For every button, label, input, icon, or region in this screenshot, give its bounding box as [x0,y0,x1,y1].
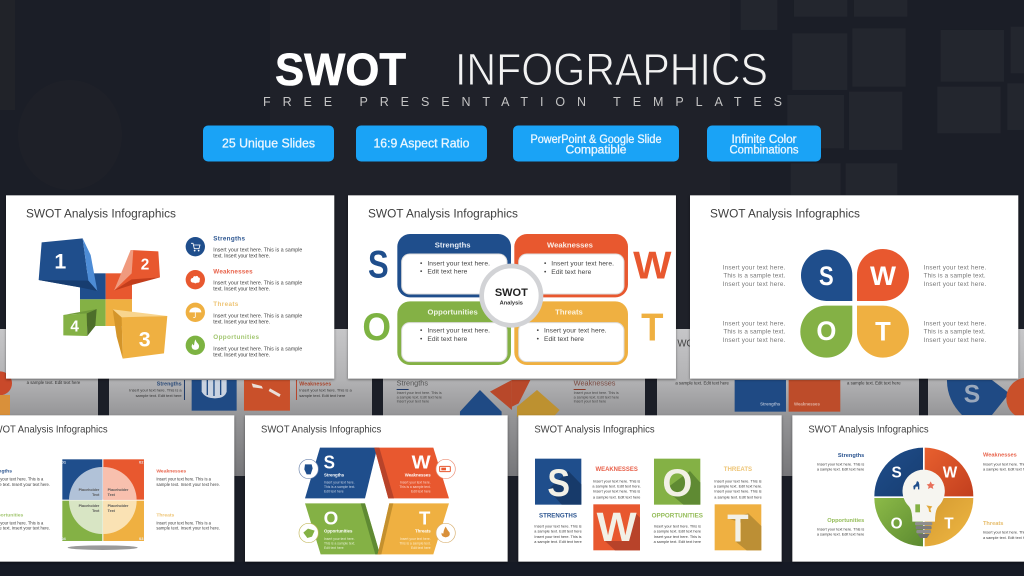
legend: weaknesses: Insert your text here. This is a sample [213,280,302,286]
3D blocks chart: 4 [70,319,79,336]
3D blocks chart [39,238,167,359]
block: weaknesses [374,448,449,498]
block: strengths: S [324,451,335,472]
background slide fragments: left half: Insert your text here. This is a [299,388,352,393]
legend: strengths: Strengths [213,235,245,242]
button: 25 unique slides: 25 Unique Slides [222,136,315,150]
square quadrant chart: 01 [62,459,67,464]
box: weaknesses [514,234,628,297]
text block: upper left [723,264,786,288]
block: opportunities: O [324,507,338,528]
panel: slide 7 light bulb pie: SWOT Analysis Infographics [808,425,929,436]
text: strengths [0,469,50,487]
background slide fragments: left half: Strengths [157,381,182,387]
text: opportunities [0,512,50,531]
text: opportunities: Opportunities [827,518,864,524]
text block: upper right: Insert your text here. [924,264,987,271]
tile: W: W [597,504,637,550]
legend: opportunities: text. Insert your text here. [213,353,270,359]
text: weaknesses [592,467,641,499]
big letters: T [641,307,664,350]
text: strengths: Insert your text here. This is [534,535,582,539]
petal: S [801,250,852,301]
background slide fragments: right half: a sample text. Edit text here [675,381,730,386]
text block: upper right: Insert your text here. [924,281,987,288]
text: opportunities: Insert your text here. This is [654,525,701,529]
background slide fragments: right half: Insert your text here. This is [574,391,619,395]
text block: upper left: Insert your text here. [723,264,786,271]
box: strengths: Strengths [435,240,471,249]
panel: slide 4 placeholder square [0,415,234,562]
box: opportunities: Opportunities [428,308,478,317]
text: opportunities [817,518,864,537]
block: weaknesses: Weaknesses [405,473,431,478]
block: threats: T [419,507,430,528]
text: threats: Insert your text here. This is [714,490,762,494]
text: strengths: a sample text. Edit text here [534,540,582,544]
box: threats: Edit text here [544,336,584,343]
icon: umbrella [186,303,205,322]
square quadrant chart: Text [108,509,116,513]
legend: threats: Threats [213,301,239,308]
3D blocks chart: 1 [54,249,66,273]
square quadrant chart: Placeholder [108,488,129,492]
box: threats: • [537,328,540,335]
block: threats [378,503,449,554]
background slide fragments: right half: a sample text. Edit text here [574,395,619,399]
box: opportunities: • [420,336,423,343]
box: threats [514,301,628,365]
panel: slide 2 four boxes with center circle: SWOT Analysis Infographics [368,206,518,220]
text: strengths: Strengths [838,453,864,459]
title: INFOGRAPHICS [455,44,768,95]
box: strengths: • [420,269,423,276]
square quadrant chart: 02 [139,459,144,464]
title: SWOT [275,44,406,95]
big letters: O [362,306,391,349]
big letters: W [633,244,672,287]
petal: W: W [870,261,897,291]
tile: T: T [727,508,749,551]
legend: threats: Insert your text here. This is a sample [213,313,302,319]
box: weaknesses: • [544,261,547,268]
box: threats: Insert your text here. [544,328,607,335]
text: strengths: a sample text. Edit text here [534,530,582,534]
square quadrant chart: Text [92,509,100,513]
tile: T [715,504,761,551]
text: threats: Threats [983,521,1003,527]
text: strengths [534,513,582,544]
legend: weaknesses: text. Insert your text here. [213,287,270,293]
background slide fragments: left half: Weaknesses [299,381,331,387]
text: opportunities: a sample text. Edit text here [654,540,701,544]
tile: S: S [547,461,570,505]
petal: W [857,249,909,301]
block: strengths: This is a sample text. [324,485,355,489]
block: opportunities [305,503,380,554]
text block: upper left: This is a sample text. [723,273,786,280]
box: weaknesses: Insert your text here. [551,261,614,268]
icon: battery [436,459,455,479]
text: weaknesses: a sample text. Edit text here. [592,485,641,489]
block: threats: Insert your text here. [400,537,431,541]
text block: lower left: This is a sample text. [723,329,786,336]
square quadrant chart: Placeholder [108,504,129,508]
button: infinite color [707,126,821,162]
pie with bulb: S [892,465,902,482]
text: opportunities: a sample text. Edit text here [654,530,701,534]
tile: S [535,459,581,505]
legend: opportunities [213,334,302,359]
text: weaknesses: Insert your text here. This is [593,480,640,484]
text: threats: Insert your text here. This is a [156,520,212,525]
text: weaknesses: Weaknesses [983,453,1017,459]
petal: O: O [816,316,836,346]
text: weaknesses: WEAKNESSES [595,467,638,473]
text: weaknesses: Insert your text here. This is [593,490,640,494]
block: strengths: Edit text here [324,490,344,494]
icon: handshake [299,523,318,543]
block: threats: Threats [415,529,431,534]
petal: O [800,306,852,358]
text block: lower right [924,320,987,344]
block: weaknesses: Insert your text here. [400,481,431,485]
box: opportunities [397,301,511,365]
background slide fragments: left half: Insert your text here. This is [397,391,442,395]
legend: strengths: text. Insert your text here. [213,254,270,260]
panel: slide 5 parallelogram hexagon [245,415,508,562]
button: powerpoint and google slide: Compatible [566,144,626,156]
panel: slide 5 parallelogram hexagon: SWOT Analysis Infographics [261,425,381,436]
block: opportunities: Opportunities [324,529,353,534]
block: threats: Edit text here [411,546,431,550]
text block: lower right: This is a sample text. [924,329,986,336]
button: 25 unique slides [203,126,334,162]
big letters: S [368,243,389,286]
petal: T [857,306,909,358]
square quadrant chart: Placeholder [79,488,100,492]
button: powerpoint and google slide: PowerPoint & Google Slide [530,134,662,146]
button: infinite color: Combinations [730,144,799,156]
text: strengths: Insert your text here. This is [817,462,864,466]
text: strengths: Insert your text here. This is [534,525,582,529]
icon: fire [436,523,455,543]
title [275,44,768,95]
text: opportunities: a sample text. Edit text here [817,533,864,537]
text block: upper right [924,264,987,288]
panel: slide 6 SWOT squares [518,415,782,562]
background slide fragments: right half: S [964,381,980,408]
background slide fragments: left half: Insert your text here [397,400,429,404]
icon: splat [186,270,205,289]
background slide fragments: left half: Strengths [397,379,428,388]
blurred band of background slides [0,329,1024,476]
square quadrant chart [61,459,144,550]
box: threats: • [537,336,540,343]
text: weaknesses [156,468,220,487]
box: opportunities: • [420,328,423,335]
text: weaknesses: sample text. Insert your text here. [156,482,220,487]
block: strengths: Strengths [324,473,345,478]
text: weaknesses: Insert your text here. This is a [156,477,212,482]
background slide fragments: left half: a sample text. Edit text here [27,380,81,385]
text: threats: sample text. Insert your text here. [156,526,220,531]
text: opportunities: Insert your text here. This is [817,527,864,531]
text: threats: Insert your text here. This is [714,480,762,484]
text block: upper right: This is a sample text. [924,273,986,280]
box: opportunities: Edit text here [427,336,468,343]
text block: lower left [723,320,786,344]
background slide fragments: right half: Strengths [760,402,781,407]
button: aspect ratio [356,126,487,162]
panel: slide 7 light bulb pie [792,415,1024,562]
button: infinite color: Infinite Color [732,134,797,146]
text block: lower right: Insert your text here. [924,337,987,344]
box: threats: Threats [555,308,583,317]
text: threats: a sample text. Edit text here. [714,485,762,489]
block: strengths: Insert your text here. [324,481,355,485]
text: strengths: a sample text. Edit text here [817,468,864,472]
legend: weaknesses [213,268,302,293]
panel: slide 1 numbered 3D blocks: SWOT Analysis Infographics [26,206,176,220]
pie with bulb: T [944,515,954,532]
legend: threats: text. Insert your text here. [213,320,270,326]
block: weaknesses: This is a sample text. [399,485,431,489]
background slide fragments: left half: Insert your text here. This is a [129,388,182,393]
text block: lower right: Insert your text here. [924,320,987,327]
panel: slide 3 four petals [690,195,1018,379]
legend: strengths [213,235,302,260]
text: threats: a sample text. Edit text here [714,495,762,499]
background slide fragments: right half: Insert your text here [574,400,606,404]
button: powerpoint and google slide [513,126,679,162]
block: threats: This is a sample text. [399,541,431,545]
icon: fist [299,459,318,479]
3D blocks chart: 3 [139,328,151,352]
background slide fragments: right half: WO [677,339,694,350]
square quadrant chart: 03 [139,536,144,541]
background slide fragments: left half [0,371,512,417]
legend: strengths: Insert your text here. This is a sample [213,247,302,253]
center circle [482,266,541,325]
text block: lower left: Insert your text here. [723,337,786,344]
legend: opportunities: Insert your text here. This is a sample [213,346,302,352]
box: strengths: • [420,260,423,267]
text: threats [983,521,1024,540]
box: opportunities: Insert your text here. [427,328,490,335]
block: strengths [305,448,377,498]
background slide fragments: right half: Weaknesses [794,402,820,407]
petal: S: S [819,261,834,291]
petal: T: T [875,317,891,347]
box: strengths: Insert your text here. [427,260,490,267]
center circle: SWOT [495,287,528,299]
button: aspect ratio: 16:9 Aspect Ratio [374,136,470,150]
block: opportunities: Insert your text here. [324,537,355,541]
text: threats [714,467,762,499]
text: weaknesses: a sample text. Edit text here [593,495,640,499]
panel: slide 3 four petals: SWOT Analysis Infographics [710,206,860,220]
text: threats [156,512,220,531]
big letters [362,243,672,350]
box: strengths: Edit text here [427,269,468,276]
legend: weaknesses: Weaknesses [213,268,253,275]
text: weaknesses [983,453,1024,472]
subtitle: FREE PRESENTATION TEMPLATES [263,95,782,109]
square quadrant chart: Text [108,493,116,497]
background slide fragments: right half: Weaknesses [574,379,616,388]
text: threats: Threats [156,512,175,518]
tile: O [654,459,700,505]
square quadrant chart: 04 [61,536,67,541]
background slide fragments: right half [512,339,1024,419]
background slide fragments: right half: a sample text. Edit text here [847,381,901,386]
icon: flame [186,336,205,355]
text: strengths [817,453,864,472]
pie with bulb [874,448,973,546]
panel: slide 6 SWOT squares: SWOT Analysis Infographics [534,425,655,436]
box: weaknesses: • [544,269,547,276]
text block: lower left: Insert your text here. [723,320,786,327]
text: opportunities: Insert your text here. This is [654,535,701,539]
background slide fragments: left half: sample text. Edit text here [299,393,346,398]
text: threats: THREATS [724,467,752,473]
panel: slide 2 four boxes with center circle [348,195,676,379]
text: weaknesses: Weaknesses [156,468,186,474]
legend: opportunities: Opportunities [213,334,259,341]
tile: O: O [662,461,692,505]
pie with bulb: W [943,465,958,482]
icon: cart [186,237,205,256]
center circle: Analysis [500,301,523,307]
square quadrant chart: Text [92,493,100,497]
background slide fragments: left half: sample text. Edit text here [136,393,182,398]
text: opportunities: OPPORTUNITIES [652,513,703,519]
block: opportunities: This is a sample text. [324,541,355,545]
legend: threats [213,301,302,326]
3D blocks chart: 2 [141,256,149,273]
pie with bulb: O [891,515,903,532]
text: opportunities [652,513,703,544]
background slide fragments: left half: a sample text. Edit text here [397,395,442,399]
block: weaknesses: Edit text here [411,490,431,494]
panel: slide 1 numbered 3D blocks [6,195,334,379]
square quadrant chart: Placeholder [79,504,100,508]
box: weaknesses: Edit text here [551,269,592,276]
box: strengths [397,234,511,297]
text: strengths: STRENGTHS [539,513,577,519]
block: weaknesses: W [412,451,431,472]
block: opportunities: Edit text here [324,546,344,550]
box: weaknesses: Weaknesses [547,241,593,250]
text block: upper left: Insert your text here. [723,281,786,288]
